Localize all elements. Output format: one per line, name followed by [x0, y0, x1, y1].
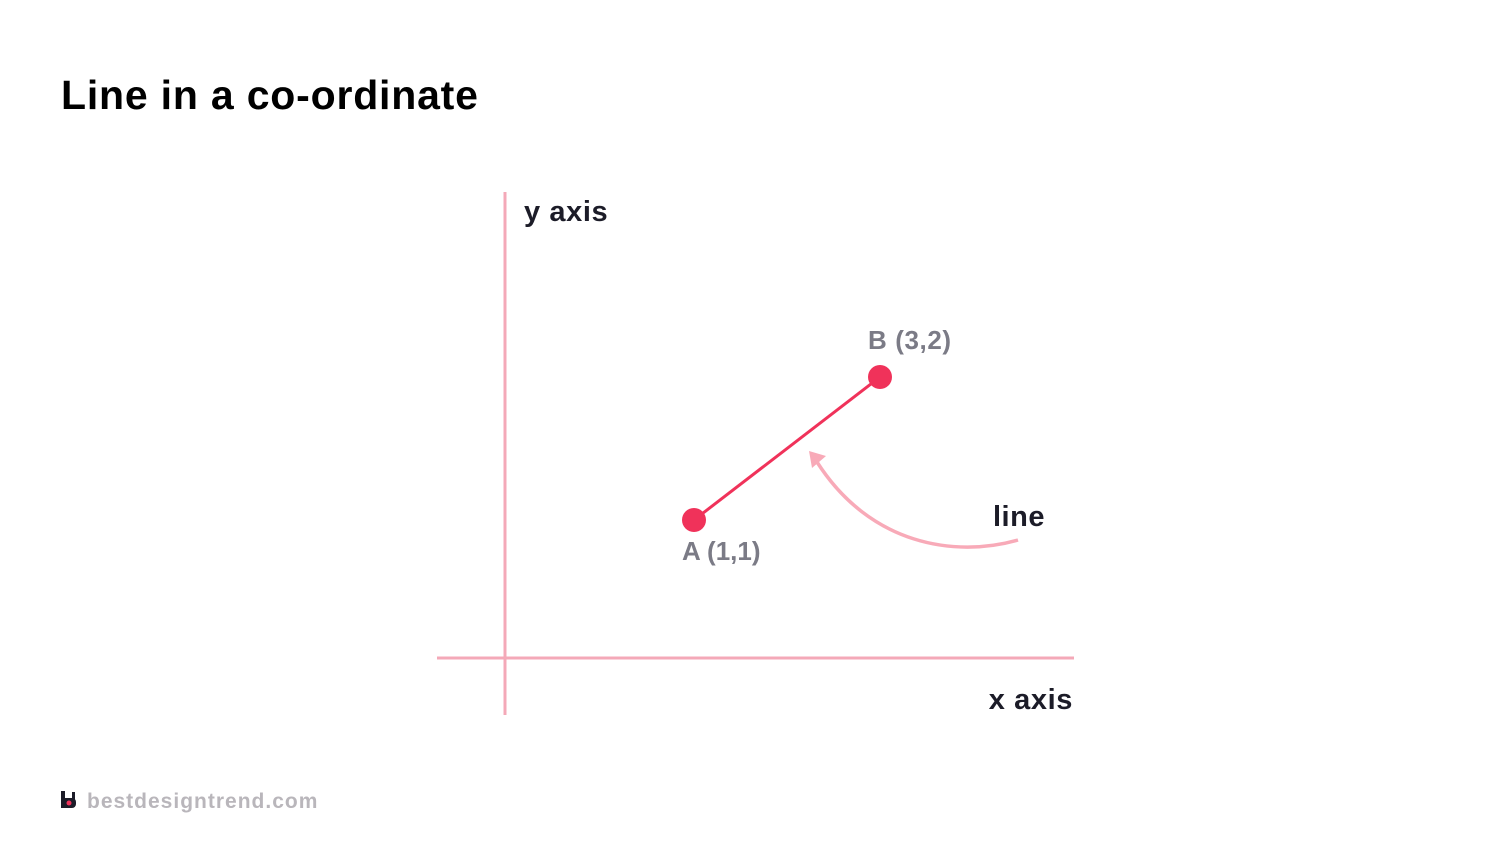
x axis label: x axis	[989, 684, 1073, 716]
line segment AB	[682, 365, 892, 532]
footer text: bestdesigntrend.com	[87, 790, 318, 813]
line label: line	[993, 501, 1045, 533]
label B: B (3,2)	[868, 325, 952, 355]
y axis	[504, 192, 506, 715]
label A: A (1,1)	[682, 536, 760, 566]
footer logo	[61, 791, 76, 808]
point A	[682, 508, 706, 532]
title: Line in a co-ordinate	[61, 72, 479, 118]
y axis label: y axis	[524, 196, 608, 228]
x axis	[437, 656, 1074, 660]
arrow	[809, 451, 1018, 547]
point B	[868, 365, 892, 389]
